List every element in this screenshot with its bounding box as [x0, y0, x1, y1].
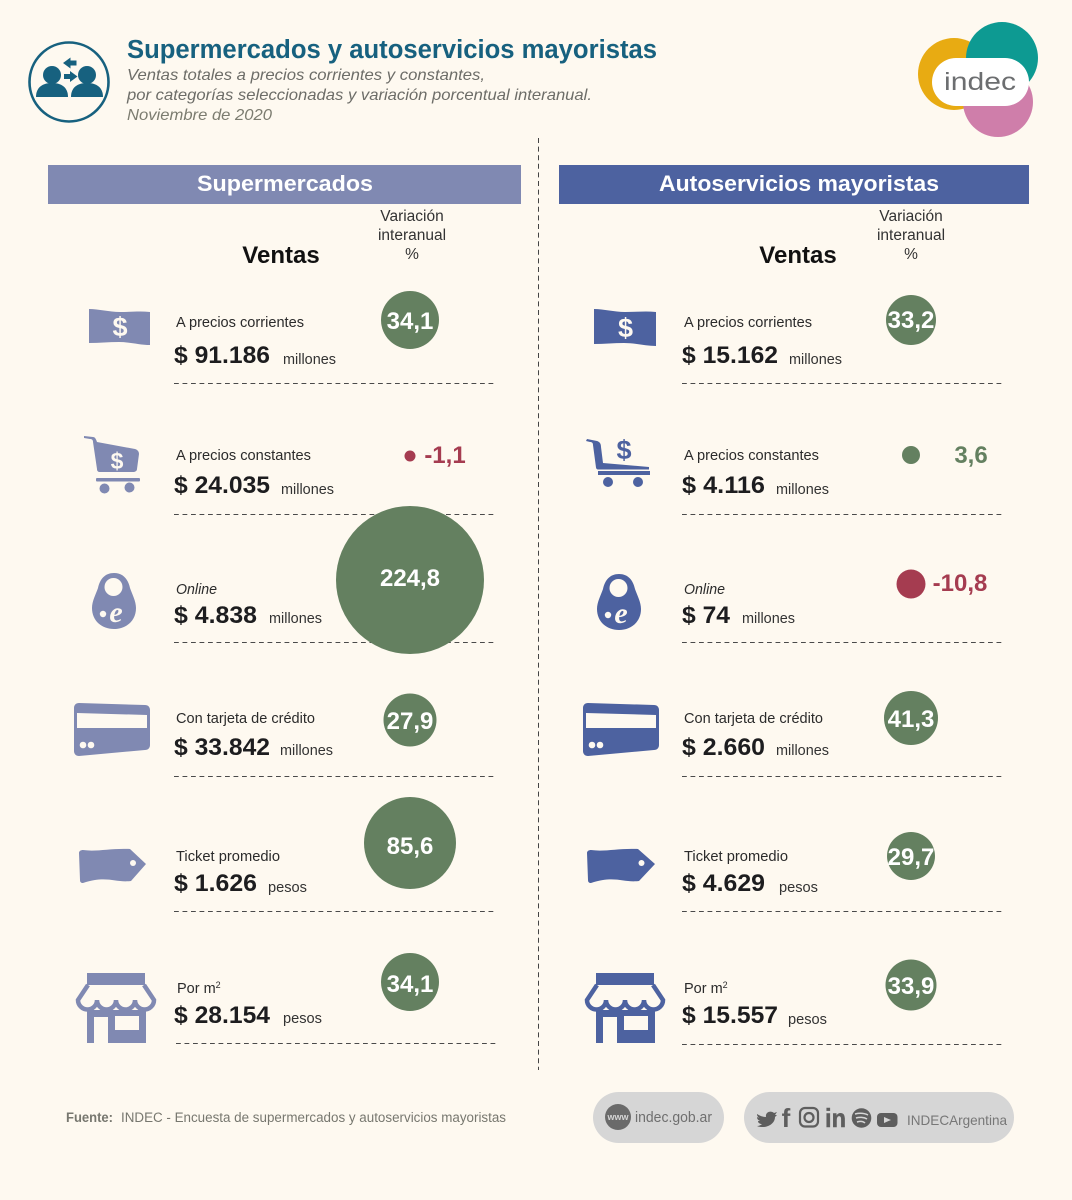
source note: Fuente:	[66, 1110, 113, 1125]
row: ticket promedio: pesos	[779, 880, 818, 896]
icon: spotify	[852, 1108, 871, 1128]
row: a precios corrientes: $ 91.186	[174, 342, 270, 369]
bubble: 85,6	[364, 797, 456, 889]
divider	[538, 138, 540, 1070]
row: ticket promedio: Ticket promedio	[684, 849, 788, 865]
icon: credit card	[74, 703, 150, 756]
bubble: 27,9	[384, 694, 436, 746]
icon: storefront	[78, 973, 154, 1043]
social media pill	[744, 1092, 1014, 1143]
icon: credit card	[583, 703, 659, 756]
row: con tarjeta de crédito: Con tarjeta de crédito	[684, 711, 823, 727]
icon: e-commerce bag: e	[614, 597, 628, 630]
icon: instagram	[800, 1108, 818, 1126]
website pill: www	[607, 1112, 629, 1122]
icon: banknote	[89, 309, 150, 345]
row: a precios corrientes: A precios corrientes	[176, 315, 304, 331]
row: a precios constantes: $ 4.116	[682, 472, 765, 499]
panel header: supermercados	[48, 165, 521, 204]
row: por m2: pesos	[283, 1011, 322, 1027]
column header: variación: interanual	[877, 227, 945, 244]
bubble: -1,1: -1,1	[424, 442, 466, 469]
row: con tarjeta de crédito: millones	[280, 743, 333, 759]
bubble: 27,9: 27,9	[387, 708, 433, 735]
bubble: 3,6	[902, 442, 988, 469]
bubble: 33,9: 33,9	[888, 973, 934, 1000]
bubble: 33,9	[886, 960, 936, 1010]
row: online: Online	[176, 582, 217, 598]
row: a precios constantes: millones	[281, 482, 334, 498]
row: a precios corrientes: millones	[283, 352, 336, 368]
social media pill: INDECArgentina	[907, 1112, 1007, 1128]
icon: e-commerce bag	[597, 574, 641, 630]
row: ticket promedio: pesos	[268, 880, 307, 896]
logo: indec	[918, 22, 1038, 137]
bubble: -10,8	[896, 570, 987, 598]
row: online	[92, 506, 497, 654]
title: Supermercados y autoservicios mayoristas	[127, 36, 657, 64]
row: con tarjeta de crédito	[583, 691, 1005, 776]
row: por m2: 2	[723, 980, 728, 990]
logo: indec: indec	[944, 68, 1016, 96]
row: online: Online	[684, 582, 725, 598]
icon: e-commerce bag: e	[109, 596, 123, 629]
bubble: 29,7: 29,7	[888, 844, 934, 871]
icon: linkedin: in	[825, 1103, 846, 1133]
bubble: 33,2: 33,2	[888, 307, 934, 334]
icon: people exchange	[30, 42, 108, 122]
bubble: 34,1: 34,1	[387, 971, 433, 998]
bubble: 41,3: 41,3	[888, 706, 934, 733]
row: con tarjeta de crédito: millones	[776, 743, 829, 759]
column header: variación: %	[904, 246, 918, 263]
subtitle: Noviembre de 2020	[127, 107, 272, 124]
row: ticket promedio: $ 4.629	[682, 870, 765, 897]
bubble: 224,8	[336, 506, 484, 654]
icon: price tag	[587, 849, 655, 883]
icon: banknote: $	[618, 313, 633, 343]
row: por m2	[587, 960, 1005, 1044]
row: a precios corrientes: millones	[789, 352, 842, 368]
icon: e-commerce bag	[92, 573, 136, 629]
subtitle	[126, 67, 592, 124]
row: por m2: pesos	[788, 1012, 827, 1028]
row: a precios corrientes: A precios corrientes	[684, 315, 812, 331]
row: online: $ 4.838	[174, 602, 257, 629]
panel header: autoservicios mayoristas: Autoservicios mayoristas	[659, 171, 939, 196]
icon: shopping cart: $	[616, 435, 632, 465]
row: ticket promedio: $ 1.626	[174, 870, 257, 897]
row: online: millones	[742, 611, 795, 627]
icon: storefront	[587, 973, 663, 1043]
row: con tarjeta de crédito: $ 2.660	[682, 734, 765, 761]
panel header: autoservicios mayoristas	[559, 165, 1029, 204]
row: ticket promedio	[587, 832, 1005, 912]
row: a precios constantes: A precios constantes	[684, 448, 819, 464]
source note: INDEC - Encuesta de supermercados y autoservicios mayoristas	[121, 1110, 506, 1125]
row: ticket promedio	[79, 797, 497, 912]
row: por m2: Por m	[684, 981, 723, 997]
row: online: millones	[269, 611, 322, 627]
row: por m2: 2	[216, 980, 221, 990]
column header: variación: interanual	[378, 227, 446, 244]
bubble: -1,1	[404, 442, 466, 469]
panel: supermercados	[48, 165, 521, 1044]
icon: youtube	[877, 1113, 898, 1127]
website pill: indec.gob.ar	[635, 1110, 712, 1126]
row: por m2: $ 28.154	[174, 1002, 270, 1029]
website pill	[593, 1092, 724, 1143]
row: por m2: $ 15.557	[682, 1002, 778, 1029]
bubble: 224,8: 224,8	[380, 565, 440, 592]
row: a precios constantes: $ 24.035	[174, 472, 270, 499]
bubble: -10,8: -10,8	[933, 570, 987, 597]
row: online	[597, 570, 1005, 642]
row: con tarjeta de crédito: Con tarjeta de crédito	[176, 711, 315, 727]
row: con tarjeta de crédito	[74, 694, 497, 776]
row: por m2: Por m	[177, 981, 216, 997]
column header: ventas: Ventas	[242, 242, 320, 269]
icon: shopping cart	[586, 435, 650, 487]
icon: facebook: f	[782, 1103, 791, 1133]
column header: variación: %	[405, 246, 419, 263]
row: online: $ 74	[682, 602, 730, 629]
row: por m2	[78, 953, 499, 1044]
bubble: 34,1: 34,1	[387, 308, 433, 335]
column header: variación	[877, 208, 945, 263]
bubble: 41,3	[884, 691, 938, 745]
bubble: 29,7	[887, 832, 935, 880]
row: a precios constantes: A precios constantes	[176, 448, 311, 464]
icon: banknote	[594, 309, 656, 346]
subtitle: por categorías seleccionadas y variación porcentual interanual.	[126, 87, 592, 104]
row: a precios corrientes: $ 15.162	[682, 342, 778, 369]
bubble: 33,2	[886, 295, 936, 345]
row: a precios constantes: millones	[776, 482, 829, 498]
icon: banknote: $	[112, 312, 128, 342]
row: ticket promedio: Ticket promedio	[176, 849, 280, 865]
icon: shopping cart: $	[111, 448, 124, 474]
bubble: 85,6: 85,6	[387, 833, 433, 860]
column header: variación	[378, 208, 446, 263]
column header: ventas: Ventas	[759, 242, 837, 269]
row: a precios constantes	[586, 435, 1005, 514]
row: con tarjeta de crédito: $ 33.842	[174, 734, 270, 761]
icon: twitter	[757, 1112, 777, 1127]
subtitle: Ventas totales a precios corrientes y constantes,	[127, 67, 485, 84]
column header: variación: Variación	[879, 208, 943, 225]
bubble: 34,1	[381, 291, 439, 349]
row: a precios corrientes	[594, 295, 1005, 384]
icon: price tag	[79, 849, 146, 883]
panel header: supermercados: Supermercados	[197, 171, 373, 196]
row: a precios corrientes	[89, 291, 497, 384]
row: a precios constantes	[84, 436, 497, 514]
icon: shopping cart	[84, 436, 140, 494]
column header: variación: Variación	[380, 208, 444, 225]
bubble: 34,1	[381, 953, 439, 1011]
panel: autoservicios mayoristas	[559, 165, 1029, 1044]
bubble: 3,6: 3,6	[954, 442, 988, 469]
